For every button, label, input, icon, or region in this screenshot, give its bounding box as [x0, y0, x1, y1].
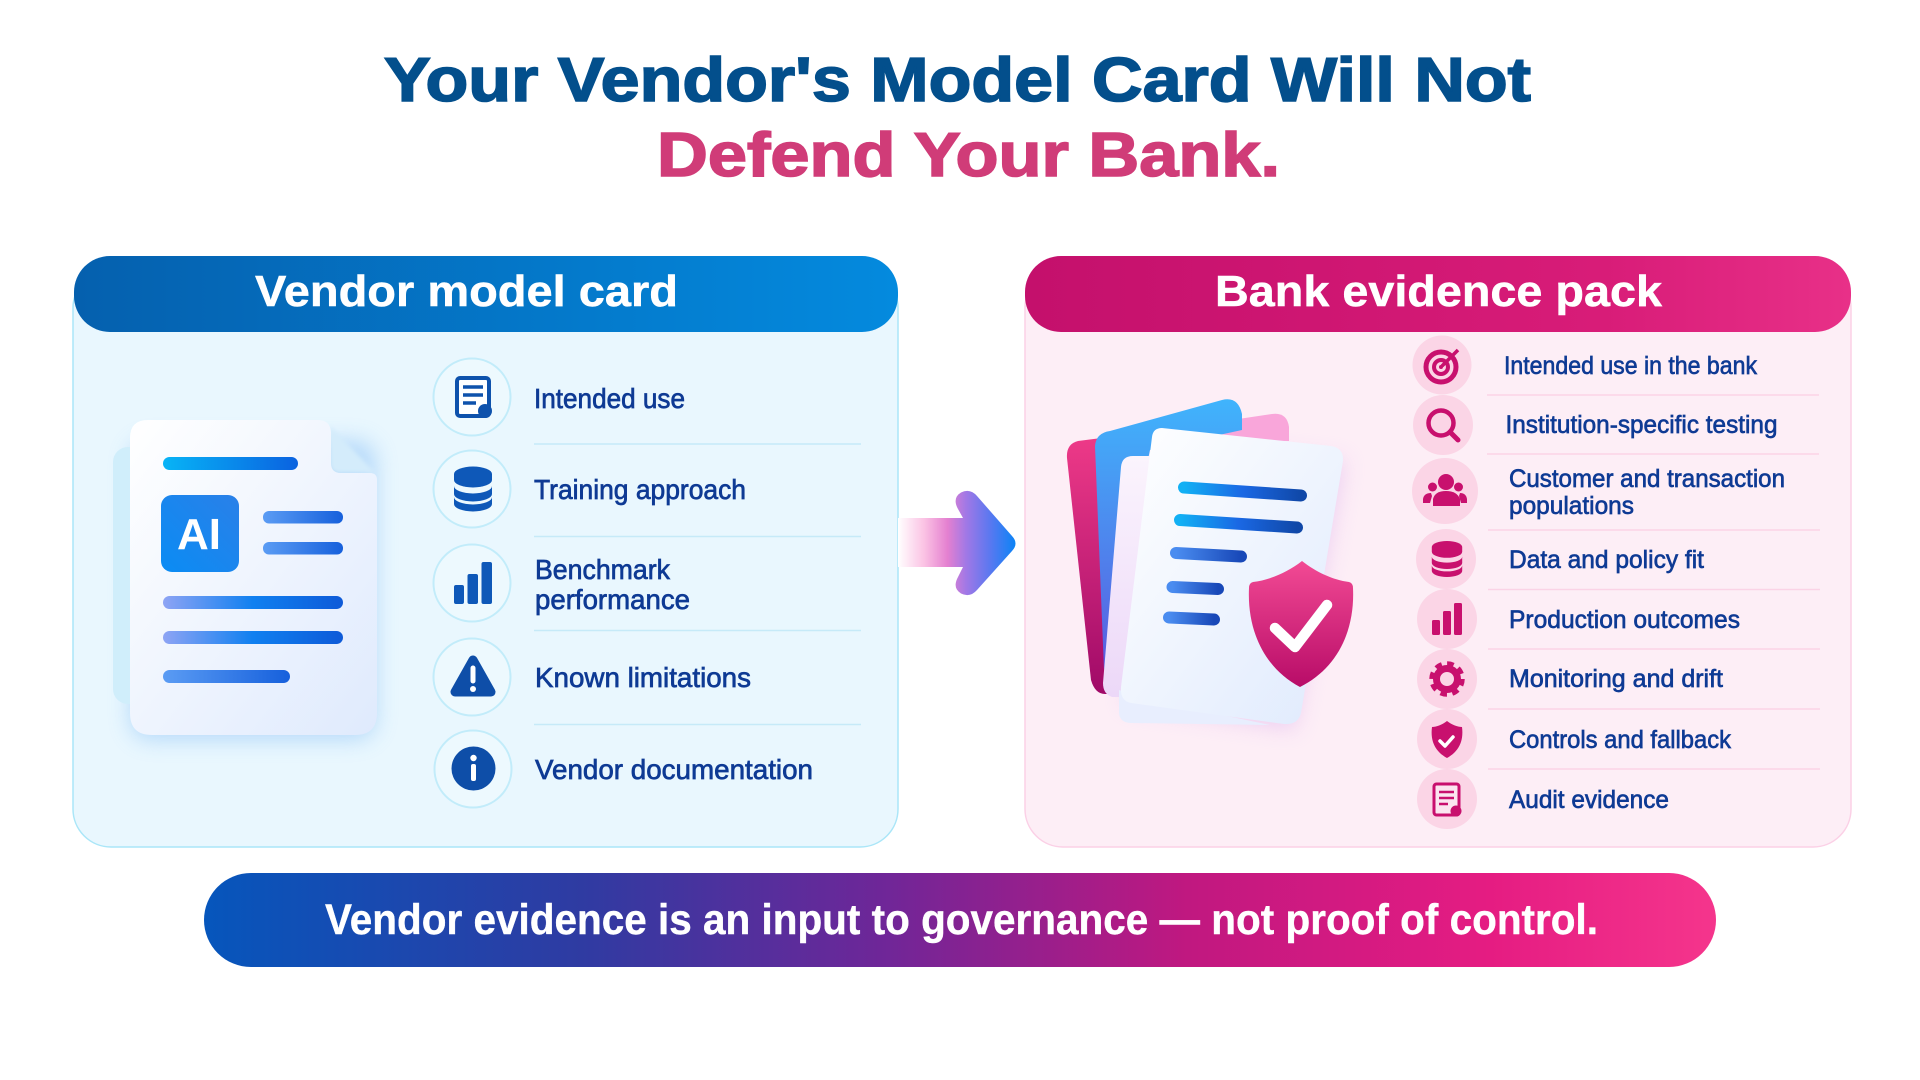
panel: vendor model card [73, 256, 898, 847]
item: training approach: Training approach [534, 474, 746, 505]
item: production outcomes: Production outcomes [1509, 606, 1740, 634]
item: data and policy fit: Data and policy fit [1509, 546, 1704, 574]
panel background [1025, 270, 1851, 847]
item: benchmark performance: performance [535, 584, 690, 615]
item: customer and transaction populations: Customer and transaction [1509, 465, 1785, 493]
item: audit evidence [1417, 769, 1669, 829]
panel header [74, 256, 898, 332]
item: known limitations [434, 638, 751, 716]
item: institution-specific testing [1413, 395, 1778, 455]
item: intended use [434, 358, 685, 436]
title: Your Vendor's Model Card Will Not [384, 46, 1531, 115]
panel: bank evidence pack [1025, 256, 1851, 847]
panel header: Vendor model card [255, 267, 678, 316]
item: monitoring and drift: Monitoring and drift [1509, 665, 1723, 693]
item: benchmark performance [434, 544, 690, 622]
item: controls and fallback [1417, 709, 1731, 769]
item: benchmark performance: Benchmark [535, 554, 671, 585]
title: Defend Your Bank. [657, 121, 1280, 190]
item: institution-specific testing: Institution-specific testing [1506, 411, 1778, 439]
illustration: evidence document stack [1067, 399, 1353, 730]
banner [204, 873, 1716, 967]
panel header: Bank evidence pack [1215, 267, 1663, 316]
item: controls and fallback: Controls and fallback [1509, 726, 1731, 754]
item: intended use in the bank [1412, 336, 1757, 394]
item: audit evidence: Audit evidence [1509, 786, 1669, 814]
item: customer and transaction populations: populations [1509, 492, 1634, 520]
item: vendor documentation [434, 730, 813, 808]
panel header [1025, 256, 1851, 332]
illustration: AI document [113, 420, 377, 740]
item: customer and transaction populations [1412, 458, 1785, 524]
illustration: AI document: AI [177, 510, 221, 559]
item: monitoring and drift [1417, 649, 1723, 709]
item: intended use: Intended use [534, 383, 685, 414]
item: data and policy fit [1416, 529, 1704, 589]
item: vendor documentation: Vendor documentation [535, 754, 813, 785]
item: intended use in the bank: Intended use in the bank [1504, 352, 1757, 380]
item: training approach [434, 450, 746, 528]
item: production outcomes [1417, 589, 1740, 649]
item: known limitations: Known limitations [535, 662, 751, 693]
banner: Vendor evidence is an input to governance — not proof of control. [325, 896, 1598, 944]
title [384, 46, 1531, 190]
panel background [73, 270, 898, 847]
arrow [898, 491, 1016, 595]
